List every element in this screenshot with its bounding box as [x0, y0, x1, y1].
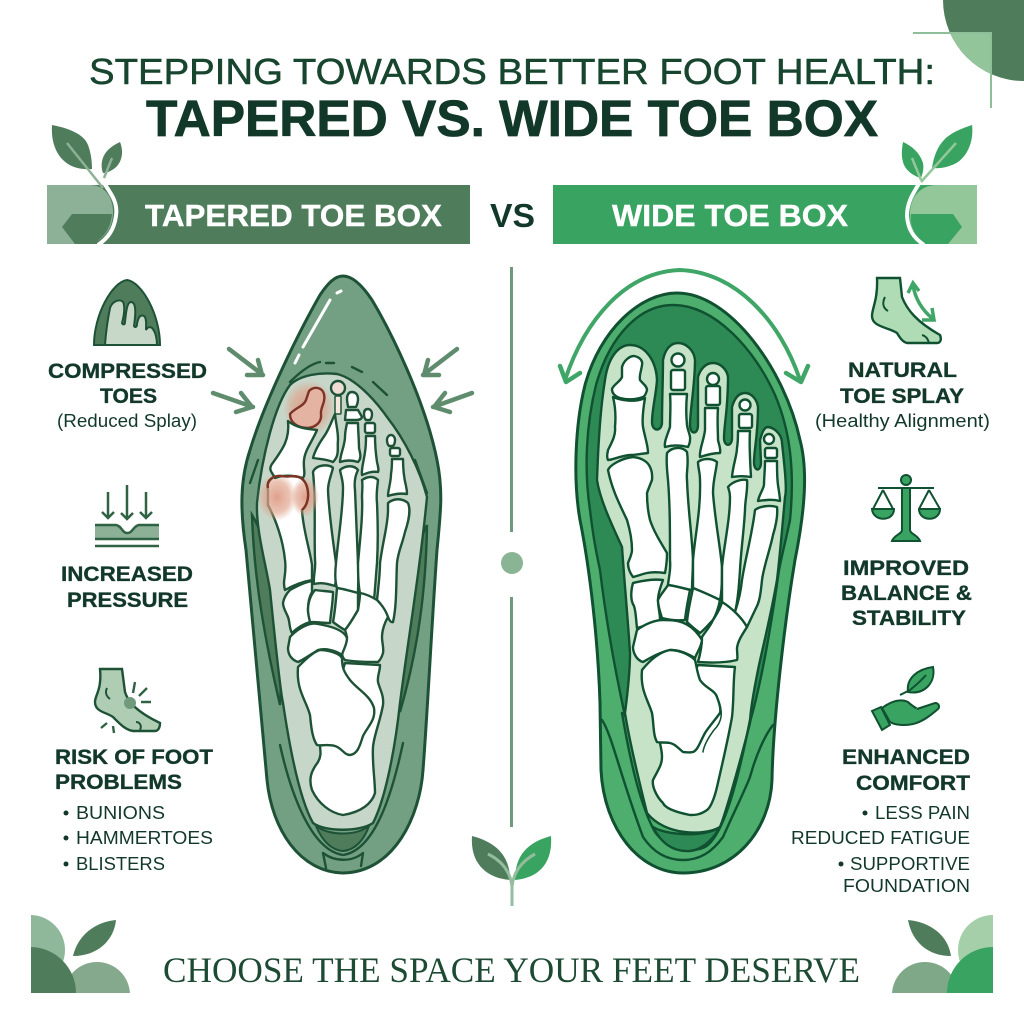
pale inner — [257, 373, 427, 830]
panel: wide shoe diagram — [560, 270, 808, 873]
heel lines — [250, 362, 427, 868]
toe bones — [607, 354, 780, 501]
text: improved balance: IMPROVED — [843, 557, 969, 580]
title: STEPPING TOWARDS BETTER FOOT HEALTH: — [89, 51, 935, 92]
text: risk of foot problems: HAMMERTOES — [76, 828, 213, 848]
text: compressed toes: TOES — [100, 385, 157, 408]
text: natural toe splay: NATURAL — [848, 359, 957, 382]
banner: tapered toe box — [47, 183, 470, 245]
text: enhanced comfort: ENHANCED — [842, 746, 970, 769]
decorative corner: bottom left — [31, 915, 130, 993]
text: compressed toes: COMPRESSED — [48, 360, 207, 383]
pressure arrows — [213, 349, 472, 412]
icon: increased pressure — [95, 485, 159, 546]
banner: wide toe box: WIDE TOE BOX — [612, 198, 848, 233]
vs label: VS — [490, 197, 535, 234]
text: risk of foot problems: PROBLEMS — [55, 771, 182, 794]
text: natural toe splay: (Healthy Alignment) — [815, 411, 990, 431]
text: risk of foot problems: BUNIONS — [76, 803, 165, 823]
heel cup — [653, 827, 720, 851]
pale inner toes — [597, 343, 786, 833]
title: TAPERED VS. WIDE TOE BOX — [146, 90, 878, 147]
text: enhanced comfort: FOUNDATION — [843, 876, 970, 896]
text: risk of foot problems: RISK OF FOOT — [55, 746, 213, 769]
text: increased pressure — [61, 563, 193, 612]
text: enhanced comfort — [791, 746, 970, 896]
toe bones — [268, 381, 407, 510]
icon: sprout right — [902, 125, 972, 182]
icon: compressed toes — [94, 280, 160, 345]
centre divider — [501, 267, 523, 827]
text: risk of foot problems: BLISTERS — [76, 854, 165, 874]
heel cup — [316, 826, 369, 851]
banner: wide toe box — [553, 182, 977, 245]
shoe highlights — [295, 291, 341, 363]
heel lines — [602, 720, 773, 860]
panel: tapered shoe diagram — [213, 276, 472, 873]
title — [89, 51, 935, 147]
text: risk of foot problems — [55, 746, 213, 874]
text: improved balance: BALANCE & — [841, 582, 972, 605]
text: natural toe splay: TOE SPLAY — [840, 385, 964, 408]
icon: balance scales — [872, 475, 940, 541]
text: compressed toes: (Reduced Splay) — [57, 411, 197, 431]
text: increased pressure: INCREASED — [61, 563, 193, 586]
text: natural toe splay — [815, 359, 990, 431]
icon: bottom sprout — [472, 836, 551, 906]
icon: foot problems — [95, 669, 160, 733]
text: improved balance — [841, 557, 972, 630]
text: compressed toes — [48, 360, 207, 431]
decorative corner: bottom right — [892, 915, 993, 993]
metatarsals and tarsals — [268, 465, 409, 815]
text: enhanced comfort: COMFORT — [856, 772, 970, 795]
text: enhanced comfort: SUPPORTIVE — [850, 854, 970, 874]
decorative corner: top right — [913, 0, 1024, 108]
text: improved balance: STABILITY — [852, 607, 966, 630]
icon: natural toe splay — [872, 278, 941, 343]
shoe outer shell — [242, 276, 441, 873]
text: enhanced comfort: REDUCED FATIGUE — [791, 828, 970, 848]
side wedges — [252, 515, 427, 712]
dark interior — [587, 305, 792, 722]
text: increased pressure: PRESSURE — [67, 589, 188, 612]
banner: tapered toe box: TAPERED TOE BOX — [145, 198, 442, 233]
footer tagline: CHOOSE THE SPACE YOUR FEET DESERVE — [163, 950, 860, 990]
pain glow — [257, 380, 335, 521]
metatarsals and tarsals — [608, 448, 777, 815]
splay arrow — [560, 270, 808, 382]
icon: sprout left — [52, 125, 122, 188]
text: enhanced comfort: LESS PAIN — [875, 803, 970, 823]
shoe outer shell — [576, 293, 805, 873]
icon: hand with leaf — [872, 667, 939, 730]
